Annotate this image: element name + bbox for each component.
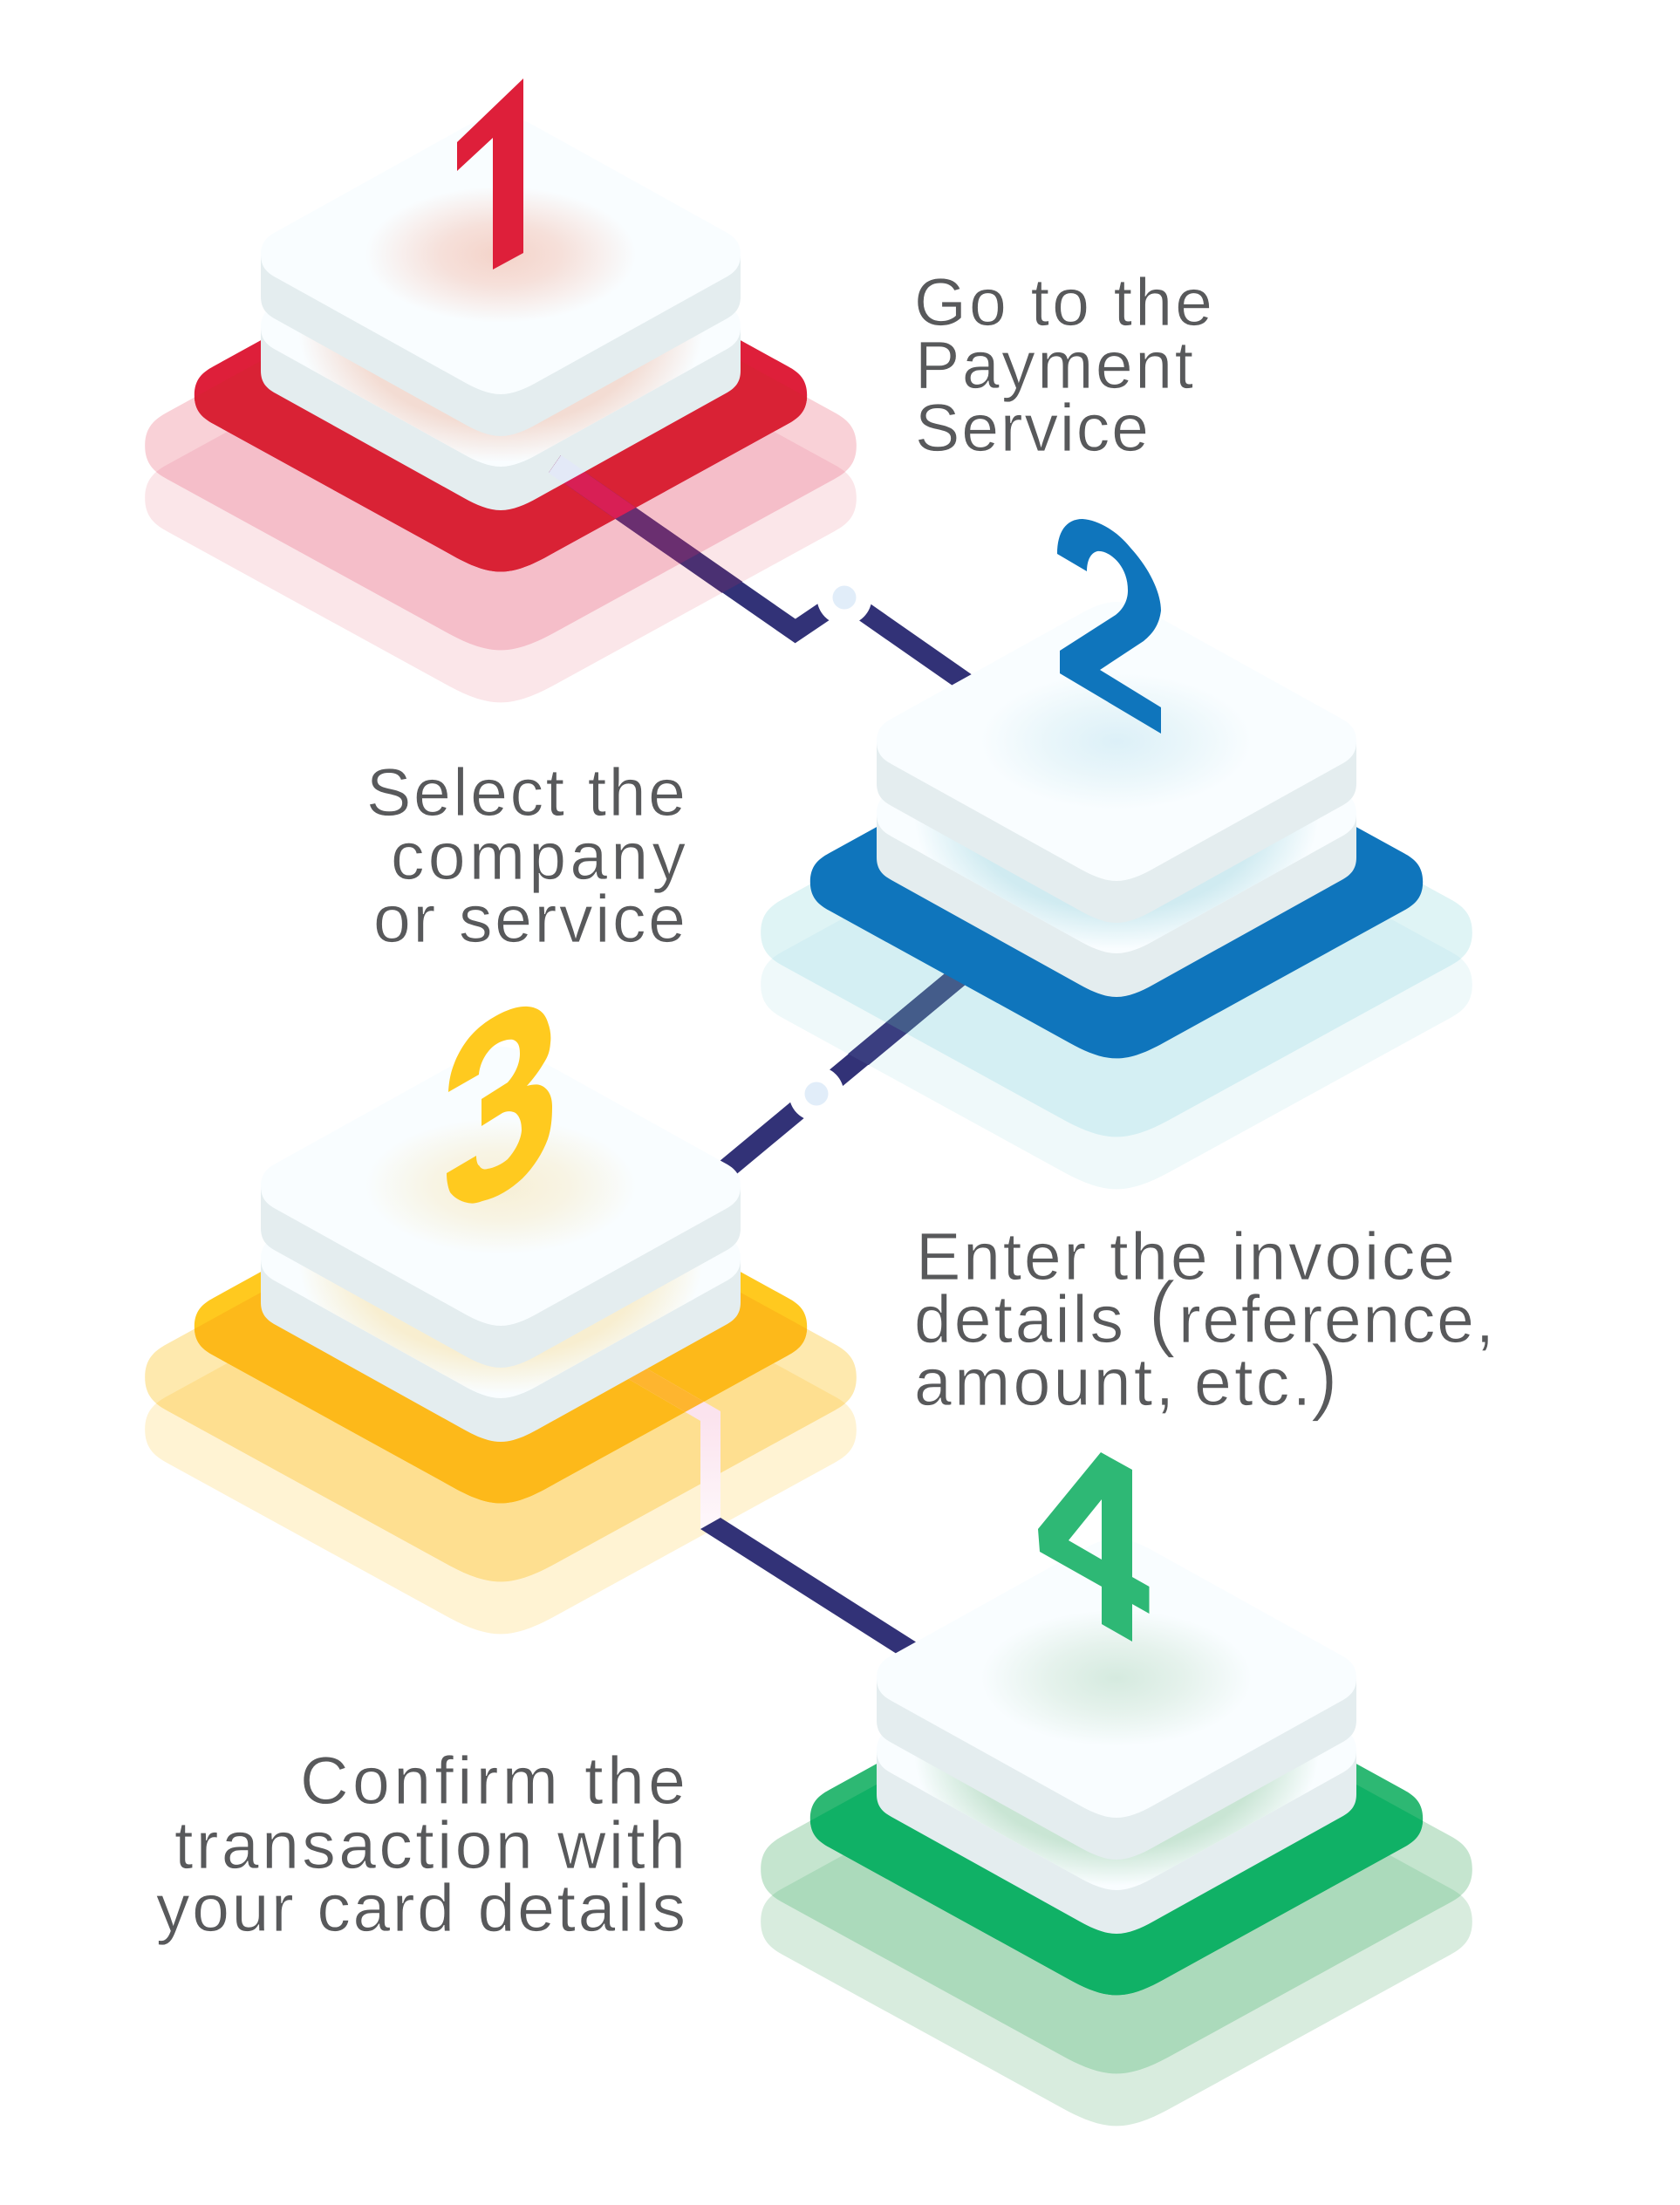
step 3 stack xyxy=(145,1129,857,1635)
upper slab glow xyxy=(981,1610,1252,1746)
green lower translucent layer xyxy=(761,1717,1472,2126)
step 2 stack xyxy=(720,674,1472,1190)
upper slab top xyxy=(261,1047,741,1326)
text: step 3: ( xyxy=(1148,1264,1176,1359)
text: step 1: Payment xyxy=(915,328,1193,403)
yellow base plate xyxy=(195,1150,807,1503)
lower slab side xyxy=(261,1259,741,1302)
text: step 3: etc. xyxy=(1194,1345,1311,1420)
lower slab side xyxy=(877,1751,1356,1794)
upper slab side xyxy=(877,1678,1356,1720)
text: step 2 xyxy=(366,755,686,957)
step 4 stack xyxy=(761,1614,1472,2126)
lower slab top with glow xyxy=(877,1750,1356,1890)
text: step 2: Select the xyxy=(366,755,686,830)
text: step 1: Go to the xyxy=(914,265,1212,340)
text: step 1: Service xyxy=(915,391,1149,466)
lower slab top with glow xyxy=(261,326,741,467)
lower slab side xyxy=(877,814,1356,857)
red lower translucent layer xyxy=(145,294,857,702)
connector from step 2 to step 3 xyxy=(720,973,965,1174)
lower slab top with glow xyxy=(261,1258,741,1398)
upper slab glow xyxy=(981,673,1252,809)
number 2 xyxy=(1057,519,1161,734)
text: step 3: ) xyxy=(1310,1328,1338,1423)
upper slab top xyxy=(877,602,1356,881)
connector from step 3 to step 4 xyxy=(700,1518,929,1662)
text: step 3: reference, xyxy=(1178,1282,1494,1357)
number 4 xyxy=(1038,1452,1150,1642)
text: step 4: your card details xyxy=(156,1871,686,1946)
upper slab side xyxy=(261,255,741,297)
step 1 stack xyxy=(145,195,857,703)
upper slab side xyxy=(261,1186,741,1228)
red upper translucent layer xyxy=(145,242,857,650)
connector node xyxy=(789,1066,844,1122)
green base plate xyxy=(810,1642,1423,1995)
text: step 4: Confirm the xyxy=(300,1744,686,1819)
upper slab side xyxy=(877,741,1356,783)
blue base plate xyxy=(810,706,1423,1058)
text: step 4: transaction with xyxy=(174,1808,686,1883)
green upper translucent layer xyxy=(761,1665,1472,2073)
upper slab top xyxy=(261,115,741,394)
yellow lower translucent layer xyxy=(145,1225,857,1634)
blue lower translucent layer xyxy=(761,781,1472,1189)
text: step 3: details xyxy=(914,1282,1123,1357)
yellow upper translucent layer xyxy=(145,1173,857,1581)
text: step 2: or service xyxy=(373,882,686,957)
text: step 1 xyxy=(914,265,1212,466)
connector from step 1 to step 2 xyxy=(555,464,981,693)
lower slab top with glow xyxy=(877,813,1356,953)
text: step 3: Enter the invoice xyxy=(916,1219,1455,1294)
lower slab side xyxy=(261,327,741,371)
connector node xyxy=(816,570,872,625)
text: step 3: amount, xyxy=(914,1345,1174,1420)
blue upper translucent layer xyxy=(761,728,1472,1137)
upper slab glow xyxy=(365,1118,636,1254)
upper slab glow xyxy=(365,187,636,323)
text: step 2: company xyxy=(391,819,686,894)
number 1 xyxy=(457,79,523,270)
upper slab top xyxy=(877,1539,1356,1818)
red base plate xyxy=(195,219,807,571)
text: step 4 xyxy=(156,1744,686,1946)
number 3 xyxy=(447,1007,552,1204)
connector pale section xyxy=(628,1369,720,1529)
text: step 3 xyxy=(914,1219,1494,1423)
